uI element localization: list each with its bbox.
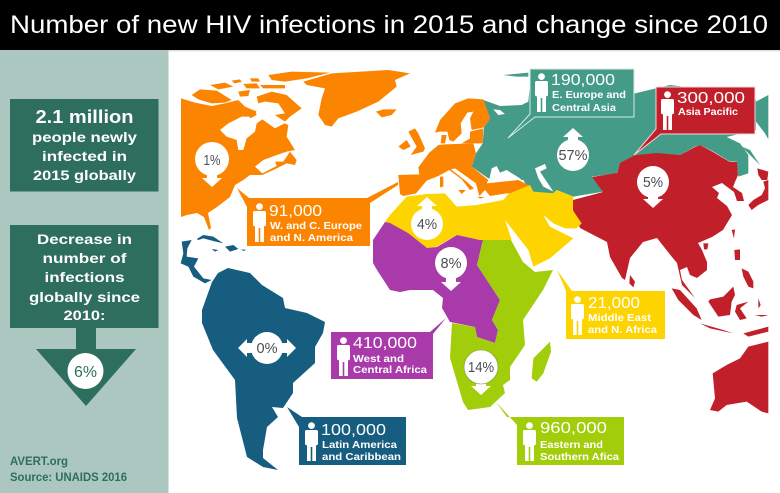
- badge: 5% down: 5%: [643, 174, 663, 191]
- badge: 0% both ways: 0%: [256, 340, 278, 357]
- callout: West and Central Africa: Central Africa: [353, 364, 427, 376]
- callout: Latin America and Caribbean: Latin America: [322, 439, 397, 451]
- callout: Middle East and N. Africa: 21,000: [588, 295, 640, 312]
- callout: West and Central Africa: 410,000: [353, 335, 417, 352]
- callout: Middle East and N. Africa: Middle East: [588, 312, 652, 324]
- region: Latin America and Caribbean: [181, 235, 325, 470]
- source credit: AVERT.org: [10, 456, 68, 468]
- stat box: global decrease: number of: [42, 250, 127, 266]
- callout: Latin America and Caribbean: 100,000: [321, 422, 386, 439]
- region: Eastern and Southern Africa: [450, 240, 553, 410]
- sidebar panel: [0, 50, 168, 493]
- callout: W. and C. Europe and N. America: and N. America: [270, 232, 353, 244]
- region: West and Central Africa: [373, 222, 500, 343]
- callout: Eastern and Southern Africa: 960,000: [540, 420, 607, 437]
- stat box: global infections: [10, 99, 158, 192]
- callout: West and Central Africa: West and: [353, 353, 404, 365]
- badge: 4% up: [411, 197, 443, 240]
- callout: Middle East and N. Africa: [557, 270, 665, 339]
- callout: E. Europe and Central Asia: [508, 69, 634, 138]
- callout: E. Europe and Central Asia: 190,000: [551, 72, 615, 89]
- stat box: global decrease: 2010:: [64, 307, 106, 323]
- region: Asia Pacific: [573, 145, 768, 413]
- callout: W. and C. Europe and N. America: 91,000: [269, 203, 322, 220]
- world map: [181, 70, 768, 470]
- callout: Latin America and Caribbean: [287, 407, 406, 465]
- callout: Asia Pacific: 300,000: [677, 90, 745, 107]
- callout: West and Central Africa: [331, 318, 446, 379]
- title bar: Number of new HIV infections in 2015 and change since 2010: [10, 11, 768, 39]
- badge: 14% down: [464, 350, 498, 395]
- stat box: global infections: people newly: [32, 129, 137, 145]
- callout: E. Europe and Central Asia: Central Asia: [552, 102, 616, 114]
- callout: Latin America and Caribbean: and Caribbean: [322, 451, 401, 463]
- stat box: global infections: 2.1 million: [36, 107, 134, 127]
- badge: 8% down: [435, 247, 467, 291]
- arrow: 6% decrease: [36, 328, 136, 406]
- region: E. Europe and Central Asia: [472, 73, 768, 197]
- source credit: Source: UNAIDS 2016: [10, 472, 127, 484]
- callout: Eastern and Southern Africa: [496, 402, 624, 465]
- badge: 57% up: 57%: [558, 147, 588, 164]
- callout: W. and C. Europe and N. America: W. and C. Europe: [270, 220, 362, 232]
- region: North America, Greenland and Europe: [181, 70, 530, 230]
- stat box: global decrease: infections: [44, 269, 125, 285]
- stat box: global decrease: globally since: [29, 289, 140, 305]
- callout: Eastern and Southern Africa: Eastern and: [540, 439, 603, 451]
- badge: 1% down: 1%: [204, 152, 220, 169]
- callout: W. and C. Europe and N. America: [237, 182, 398, 246]
- title bar: [0, 0, 780, 50]
- badge: 1% down: [195, 142, 229, 187]
- badge: 4% up: 4%: [417, 216, 437, 233]
- callout: Eastern and Southern Africa: Southern Afica: [540, 451, 619, 463]
- arrow: 6% decrease: 6%: [74, 364, 97, 381]
- stat box: global decrease: Decrease in: [37, 231, 132, 247]
- badge: 57% up: [557, 128, 589, 171]
- stat box: global infections: infected in: [42, 148, 127, 164]
- callout: Middle East and N. Africa: and N. Africa: [588, 324, 657, 336]
- stat box: global decrease: [10, 225, 158, 328]
- callout: E. Europe and Central Asia: E. Europe and: [552, 89, 626, 101]
- badge: 5% down: [637, 166, 669, 208]
- callout: Asia Pacific: Asia Pacific: [678, 106, 738, 118]
- source credit: [10, 456, 127, 484]
- badge: 0% both ways: [238, 332, 296, 364]
- stat box: global infections: 2015 globally: [33, 167, 136, 183]
- badge: 14% down: 14%: [468, 359, 494, 376]
- badge: 8% down: 8%: [440, 255, 462, 272]
- region: Middle East and N. Africa: [385, 185, 582, 267]
- callout: Asia Pacific: [634, 87, 755, 155]
